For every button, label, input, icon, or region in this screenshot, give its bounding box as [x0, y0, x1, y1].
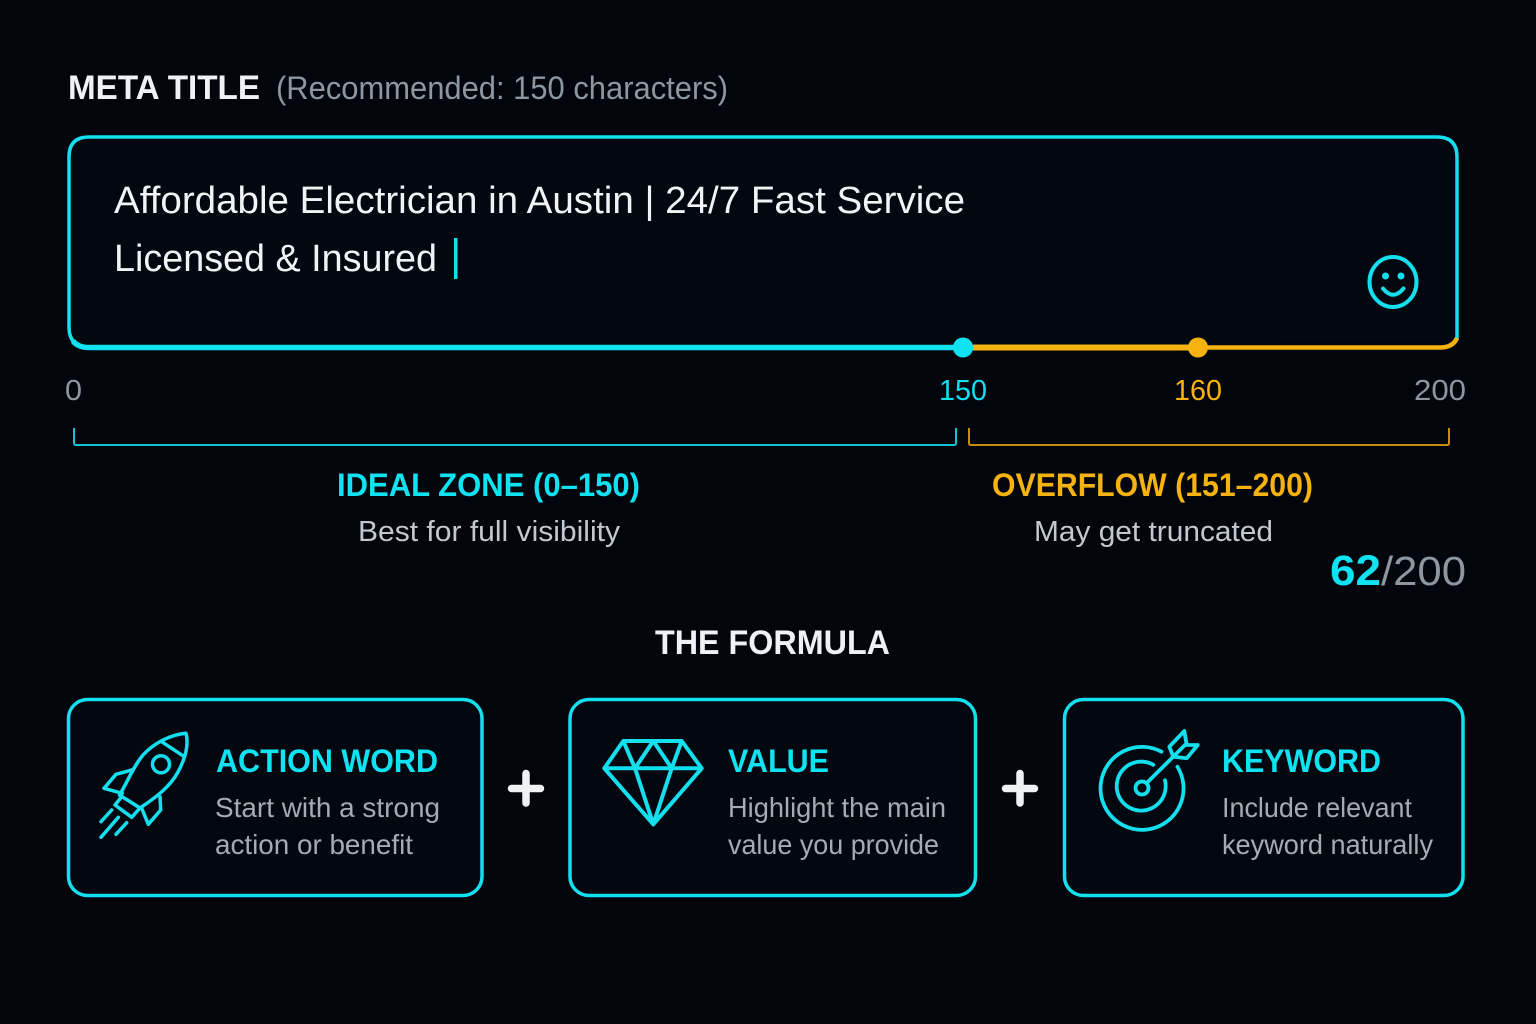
text cursor	[454, 238, 458, 279]
icon: rocket	[101, 733, 187, 837]
scale labels	[65, 375, 1466, 407]
label: overflow	[992, 467, 1313, 548]
icon: diamond	[604, 741, 702, 824]
panel: value	[570, 700, 976, 896]
heading: meta title	[68, 69, 728, 107]
scale labels: 0	[65, 375, 82, 407]
icon: target with arrow	[1101, 731, 1198, 830]
card text: KEYWORD	[1222, 743, 1381, 779]
icon: smiley	[1370, 257, 1416, 307]
card text: action or benefit	[215, 829, 413, 860]
character counter	[1330, 547, 1466, 595]
scale labels: 200	[1414, 375, 1466, 407]
card text: Include relevant	[1222, 792, 1412, 823]
label: ideal zone: IDEAL ZONE (0–150)	[337, 467, 640, 503]
bracket: ideal zone	[74, 428, 956, 445]
plus sign	[1006, 774, 1034, 803]
scale labels: 160	[1174, 375, 1222, 407]
card text	[215, 743, 440, 860]
input text: Licensed & Insured	[114, 238, 437, 280]
card text: ACTION WORD	[216, 743, 438, 779]
bracket: overflow	[969, 428, 1449, 445]
progress bar	[73, 338, 1457, 358]
label: overflow: OVERFLOW (151–200)	[992, 467, 1313, 503]
label: overflow: May get truncated	[1034, 516, 1273, 548]
card text: Highlight the main	[728, 792, 946, 823]
card text: VALUE	[728, 743, 829, 779]
card text: value you provide	[728, 829, 939, 860]
card text: keyword naturally	[1222, 829, 1433, 860]
input text	[114, 180, 965, 280]
character counter: /200	[1381, 548, 1466, 594]
character counter: 62	[1330, 547, 1381, 595]
card text: Start with a strong	[215, 792, 440, 823]
label: ideal zone: Best for full visibility	[358, 516, 621, 548]
heading: the formula: THE FORMULA	[655, 624, 890, 662]
card text	[728, 743, 946, 860]
card text	[1222, 743, 1433, 860]
panel: action word	[68, 700, 482, 896]
heading: meta title: (Recommended: 150 characters)	[276, 70, 728, 106]
label: ideal zone	[337, 467, 640, 548]
scale labels: 150	[939, 375, 987, 407]
panel: keyword	[1064, 700, 1463, 896]
panel: title input box	[69, 137, 1457, 347]
plus sign	[512, 774, 540, 803]
input text: Affordable Electrician in Austin | 24/7 Fast Service	[114, 180, 965, 222]
heading: meta title: META TITLE	[68, 69, 260, 107]
